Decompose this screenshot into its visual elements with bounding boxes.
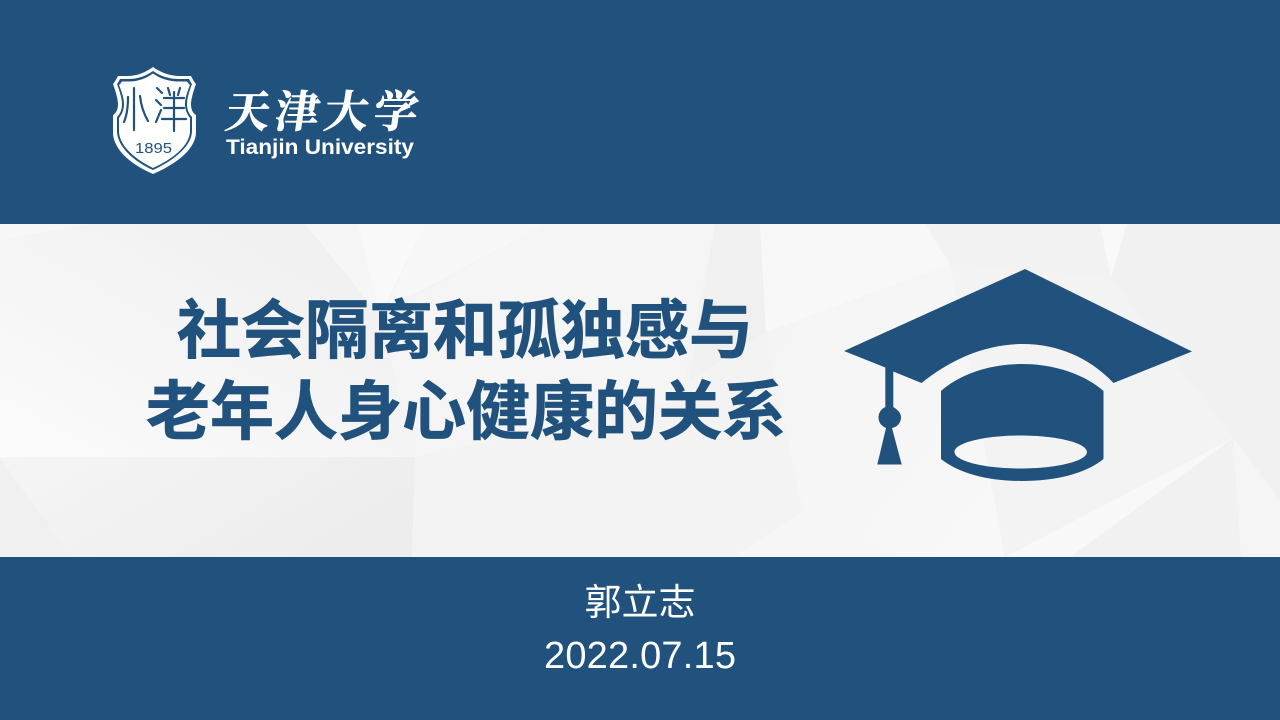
icon: university shield logo <box>113 67 196 174</box>
panel: top banner <box>0 0 1280 224</box>
icon: university shield logo: 1895 <box>135 140 172 157</box>
logo wordmark: English name: Tianjin University <box>226 136 414 159</box>
seal glyphs <box>124 88 186 131</box>
title: 社会隔离和孤独感与 <box>177 295 753 367</box>
date: 2022.07.15 <box>544 635 736 677</box>
panel: polygon background band <box>0 224 1280 557</box>
title: 老年人身心健康的关系 <box>146 376 786 448</box>
author name: 郭立志 <box>584 582 696 623</box>
icon: graduation cap <box>844 269 1192 481</box>
logo wordmark: Chinese name: 天津大学 <box>222 76 423 140</box>
panel: bottom banner <box>0 557 1280 720</box>
title <box>146 295 786 448</box>
